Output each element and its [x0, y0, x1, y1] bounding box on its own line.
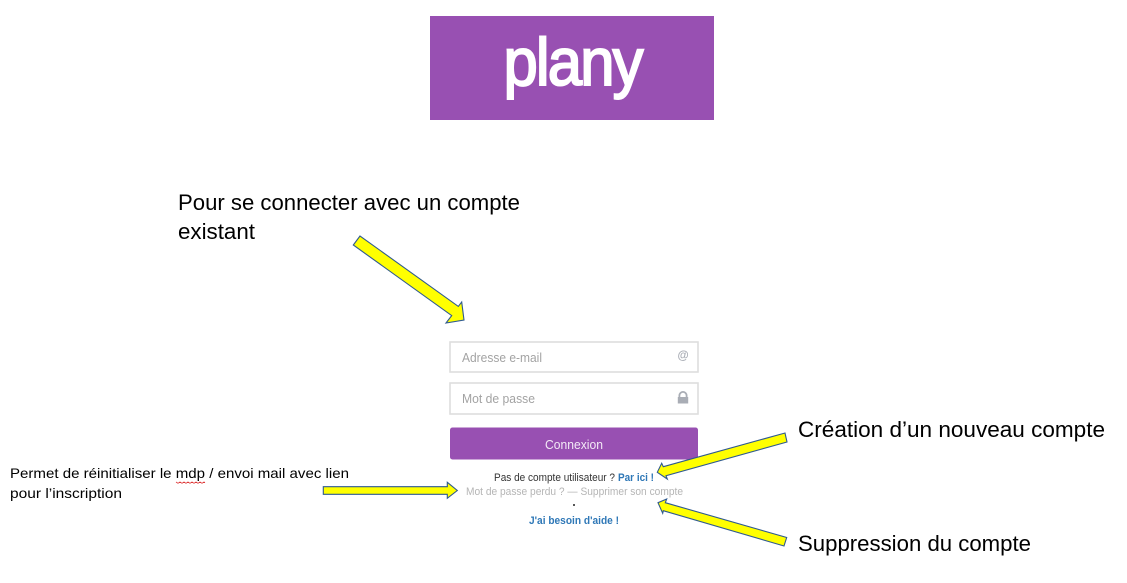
- callout: password reset text: [10, 465, 349, 501]
- logo: plany banner: [430, 16, 714, 120]
- arrow: towards delete account: [658, 499, 787, 546]
- arrow: towards login fields: [353, 236, 464, 323]
- password field: Mot de passe: [462, 392, 535, 406]
- email field: [450, 342, 698, 372]
- callout: password reset text: Permet de réinitialiser le mdp / envoi mail avec lien: [10, 465, 349, 481]
- password field: [450, 383, 698, 414]
- link: help: J'ai besoin d'aide !: [529, 515, 619, 527]
- link: create account: Pas de compte utilisateur ?: [494, 472, 615, 484]
- link: create account: Par ici !: [618, 472, 654, 484]
- login form: [450, 342, 698, 527]
- callout: existing account text: existant: [178, 219, 256, 244]
- email field: Adresse e-mail: [462, 351, 542, 365]
- login button: Connexion: [545, 438, 603, 452]
- callout: new account text: Création d’un nouveau compte: [798, 417, 1105, 442]
- callout: delete account text: Suppression du compte: [798, 531, 1031, 556]
- separator dot: [573, 504, 575, 506]
- logo: plany banner: plany: [504, 25, 644, 100]
- arrow: towards create account: [657, 433, 787, 479]
- link: lost password and delete account: Mot de passe perdu ? — Supprimer son compte: [466, 486, 683, 498]
- email field: @: [678, 350, 689, 362]
- callout: existing account text: Pour se connecter avec un compte: [178, 190, 520, 215]
- login button: [450, 428, 698, 460]
- callout: existing account text: [178, 190, 520, 244]
- arrow: towards lost password: [323, 482, 457, 498]
- callout: password reset text: pour l’inscription: [10, 485, 122, 501]
